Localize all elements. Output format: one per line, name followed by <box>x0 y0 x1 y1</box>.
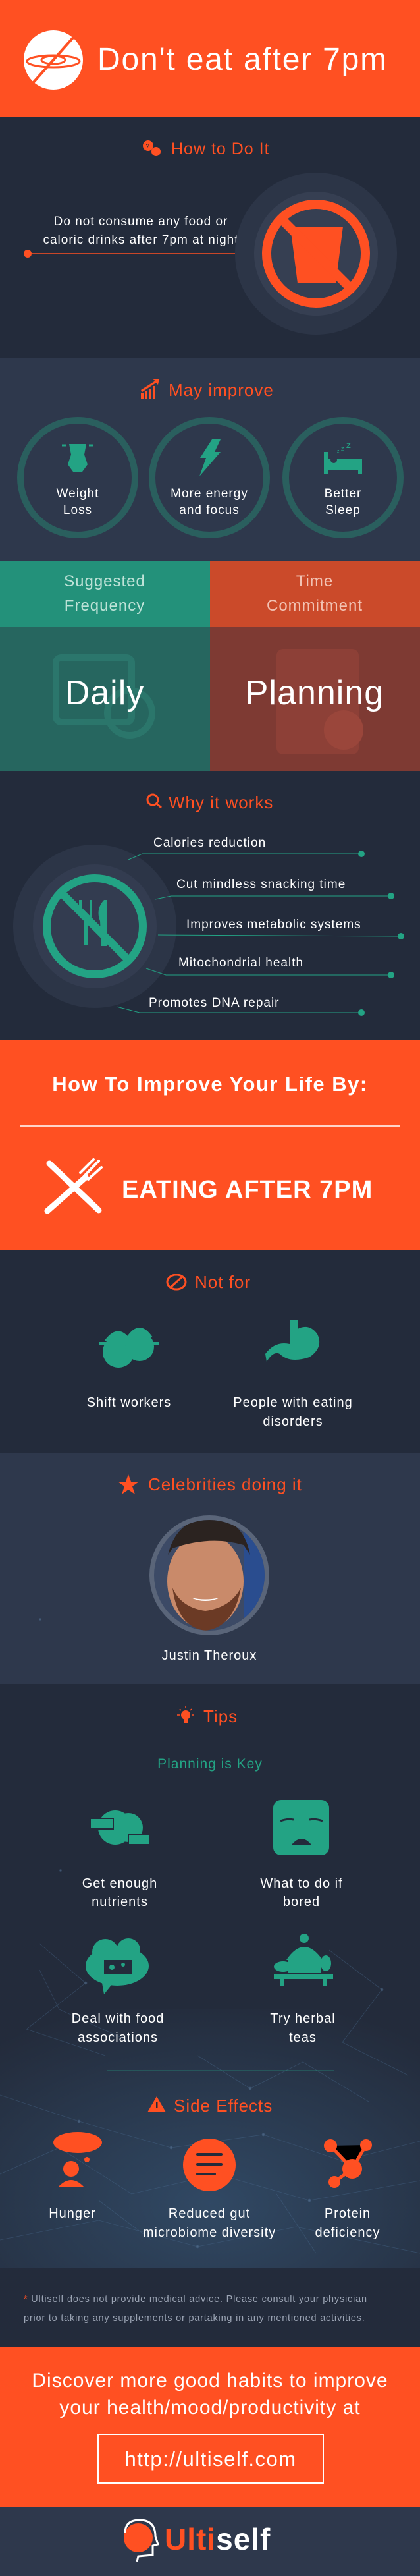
effect: protein: deficiency <box>315 2226 380 2240</box>
tip: bored: bored <box>283 1895 320 1909</box>
panel: call to action: your health/mood/productivity at <box>59 2397 361 2419</box>
heading: celebrities: Celebrities doing it <box>148 1474 302 1494</box>
tip: nutrients <box>82 1810 157 1909</box>
network pattern background <box>0 1618 420 2253</box>
url button: http://ultiself.com <box>124 2448 297 2471</box>
panel: celebrities <box>118 1474 302 1663</box>
photo: Justin Theroux <box>149 1515 276 1635</box>
panel: time commitment <box>246 573 384 754</box>
heading: not for <box>167 1272 251 1292</box>
url button <box>98 2434 323 2483</box>
list: reasons: Cut mindless snacking time <box>176 878 346 891</box>
effect: gut: microbiome diversity <box>143 2226 276 2240</box>
effect: protein: Protein <box>325 2206 371 2221</box>
panel: call to action <box>32 2370 388 2483</box>
list: reasons: Improves metabolic systems <box>186 918 361 932</box>
heading: how to do it: How to Do It <box>171 140 270 158</box>
item: eating disorders <box>233 1320 353 1429</box>
disclaimer: * Ultiself does not provide medical advice. Please consult your physician <box>24 2294 367 2305</box>
header <box>24 30 388 90</box>
tip: food associations: associations <box>78 2030 158 2045</box>
item: weight loss <box>20 420 135 535</box>
panel: suggested frequency: Suggested <box>64 573 145 590</box>
panel: time commitment: Commitment <box>267 597 363 615</box>
panel: celebrities: Justin Theroux <box>162 1648 257 1663</box>
item: weight loss: Weight <box>57 487 99 501</box>
heading: why it works: Why it works <box>169 793 273 812</box>
list: reasons: Promotes DNA repair <box>149 996 280 1010</box>
icon: planning watermark <box>276 649 363 754</box>
list: reasons: Mitochondrial health <box>178 956 303 970</box>
panel: time commitment: Time <box>296 573 333 590</box>
icon: calendar watermark <box>56 658 152 735</box>
item: eating disorders: disorders <box>263 1414 323 1429</box>
effect: hunger: Hunger <box>49 2206 96 2221</box>
item: sleep: Better <box>325 487 361 501</box>
icon: no cutlery <box>13 845 176 1008</box>
panel: suggested frequency: Daily <box>65 674 144 712</box>
item: weight loss: Loss <box>63 503 92 517</box>
panel: how to improve banner: How To Improve Your Life By: <box>52 1073 368 1096</box>
text: instruction: Do not consume any food or <box>54 215 228 229</box>
heading: side effects: Side Effects <box>174 2096 273 2115</box>
list: reasons <box>117 836 404 1016</box>
list: reasons: Calories reduction <box>153 836 266 850</box>
item: shift workers <box>87 1328 171 1410</box>
item: sleep <box>286 420 400 535</box>
item: sleep: Z <box>346 442 352 450</box>
tip: nutrients: nutrients <box>92 1895 148 1909</box>
subheading: planning is key: Planning is Key <box>157 1756 263 1772</box>
item: energy: and focus <box>179 503 240 517</box>
title: Don't eat after 7pm <box>97 42 388 77</box>
panel: side effects <box>49 2096 380 2240</box>
effect: gut <box>143 2139 276 2240</box>
item: energy <box>152 420 267 535</box>
icon: crossed plate <box>24 30 83 90</box>
icon: no cup <box>235 173 397 335</box>
panel: how to improve banner: EATING AFTER 7PM <box>122 1176 373 1204</box>
item: eating disorders: People with eating <box>233 1395 353 1410</box>
panel: time commitment: Planning <box>246 674 384 712</box>
tip: herbal teas: Try herbal <box>270 2011 336 2026</box>
panel: suggested frequency: Frequency <box>65 597 145 615</box>
item: sleep: z <box>341 445 345 452</box>
tip: herbal teas <box>270 1934 336 2045</box>
tip: herbal teas: teas <box>289 2030 317 2045</box>
panel: tips <box>72 1706 343 2045</box>
tip: bored <box>260 1800 343 1909</box>
panel: call to action: Discover more good habits to improve <box>32 2370 388 2392</box>
heading: tips <box>177 1706 238 1726</box>
effect: hunger <box>49 2132 102 2221</box>
item: energy: More energy <box>171 487 248 501</box>
footer logo <box>124 2520 271 2562</box>
panel: why it works <box>13 793 404 1016</box>
item: sleep: Sleep <box>325 503 361 517</box>
icon: crossed knife and fork <box>47 1160 101 1211</box>
tip: bored: What to do if <box>260 1876 343 1891</box>
panel: how to improve banner <box>20 1073 400 1211</box>
heading: may improve: May improve <box>169 380 274 400</box>
effect: gut: Reduced gut <box>169 2206 250 2221</box>
panel: may improve <box>20 379 400 535</box>
connector line <box>24 250 254 258</box>
panel: suggested frequency <box>56 573 152 735</box>
panel: not for <box>87 1272 353 1429</box>
item: sleep: z <box>337 449 340 454</box>
footer logo: Ultiself <box>165 2522 271 2556</box>
heading: not for: Not for <box>195 1272 251 1292</box>
heading: how to do it: ? <box>145 143 151 150</box>
effect: protein <box>315 2139 380 2240</box>
tip: nutrients: Get enough <box>82 1876 157 1891</box>
disclaimer: prior to taking any supplements or partaking in any mentioned activities. <box>24 2313 365 2324</box>
tip: food associations <box>72 1938 164 2045</box>
panel: how to do it: caloric drinks after 7pm at night <box>43 233 239 247</box>
disclaimer <box>24 2294 367 2324</box>
heading: tips: Tips <box>203 1706 238 1726</box>
tip: food associations: Deal with food <box>72 2011 164 2026</box>
item: shift workers: Shift workers <box>87 1395 171 1410</box>
panel: how to do it <box>24 140 397 335</box>
